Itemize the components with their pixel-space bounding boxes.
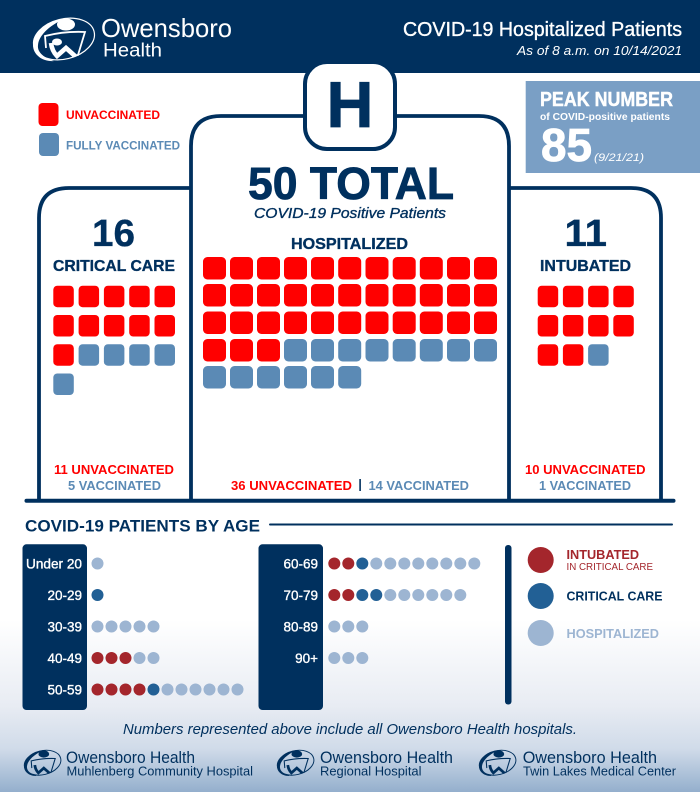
intubated totals [525, 462, 646, 493]
icon: Owensboro Health mark [29, 12, 99, 66]
peak number callout [526, 81, 700, 173]
age labels: 30-39 [47, 620, 82, 634]
age labels: 50-59 [47, 682, 82, 698]
intubated squares [538, 286, 634, 366]
logo: Owensboro Health [29, 12, 232, 66]
total subtitle: COVID-19 Positive Patients [254, 206, 446, 222]
logo wordmark [101, 13, 232, 62]
footer logo: Twin Lakes: Twin Lakes Medical Center [523, 765, 676, 779]
footer logo: Muhlenberg: Muhlenberg Community Hospital [66, 765, 253, 779]
critical care count: 16 [92, 213, 135, 255]
intubated count: 11 [564, 213, 607, 255]
age labels [283, 556, 318, 666]
critical care totals: 5 VACCINATED [68, 478, 161, 493]
hospitalized totals: 14 VACCINATED [368, 478, 469, 493]
panel: critical care [53, 213, 175, 493]
age labels: 60-69 [283, 556, 318, 572]
age labels: 20-29 [47, 588, 82, 603]
panel: hospitalized [203, 158, 497, 493]
logo wordmark: Owensboro [101, 13, 232, 43]
legend: patient severity: CRITICAL CARE [566, 589, 663, 604]
icon: hospital H [305, 62, 395, 149]
icon: hospital H: H [327, 68, 373, 141]
footer logo: Muhlenberg: Owensboro Health [66, 748, 195, 767]
peak number callout: 85 [541, 119, 592, 171]
chart: age groups 60 and over [258, 544, 480, 710]
critical care heading: CRITICAL CARE [53, 258, 175, 275]
legend: patient severity: IN CRITICAL CARE [566, 562, 653, 573]
total count: 50 TOTAL [248, 158, 454, 209]
footer logo: Muhlenberg [22, 747, 253, 779]
hospitalized heading: HOSPITALIZED [291, 236, 408, 253]
footer logo: Twin Lakes [477, 747, 676, 779]
intubated totals: 1 VACCINATED [539, 478, 631, 493]
legend: patient severity: HOSPITALIZED [566, 626, 659, 641]
hospitalized totals [231, 478, 469, 493]
panel frames [26, 116, 674, 501]
age labels: 40-49 [47, 651, 82, 666]
critical care totals: 11 UNVACCINATED [54, 462, 174, 477]
header band [0, 0, 700, 73]
hospitalized squares [203, 257, 497, 388]
header title: COVID-19 Hospitalized Patients [403, 19, 682, 41]
header date: As of 8 a.m. on 10/14/2021 [516, 44, 682, 58]
legend: vaccination status [38, 103, 180, 156]
age labels: 90+ [295, 651, 318, 666]
age labels [26, 556, 82, 698]
peak number callout: (9/21/21) [594, 152, 644, 164]
intubated heading: INTUBATED [540, 258, 631, 275]
peak number callout: PEAK NUMBER [540, 89, 673, 111]
hospitalized totals: 36 UNVACCINATED [231, 478, 352, 493]
panel: intubated [525, 213, 646, 493]
intubated totals: 10 UNVACCINATED [525, 462, 646, 477]
footnote: Numbers represented above include all Owensboro Health hospitals. [123, 721, 577, 738]
age labels: 80-89 [283, 620, 318, 634]
legend: vaccination status: UNVACCINATED [66, 108, 160, 122]
legend: patient severity [505, 545, 663, 704]
age labels: 70-79 [283, 588, 318, 603]
footer logo: Regional: Regional Hospital [320, 765, 422, 779]
age labels: Under 20 [26, 556, 82, 572]
logo wordmark: Health [103, 40, 162, 62]
peak number callout: of COVID-positive patients [540, 112, 670, 123]
critical care totals [54, 462, 174, 493]
patient dots [92, 558, 244, 696]
critical care squares [53, 286, 175, 395]
legend: vaccination status: FULLY VACCINATED [66, 138, 180, 152]
patient dots [328, 558, 480, 664]
footer logo: Twin Lakes: Owensboro Health [523, 748, 657, 767]
footer logo: Regional [275, 747, 453, 779]
legend: patient severity: INTUBATED [566, 547, 639, 562]
section heading: patients by age: COVID-19 PATIENTS BY AGE [25, 517, 260, 536]
chart: age groups under 60 [22, 544, 244, 710]
footer logo: Regional: Owensboro Health [320, 748, 453, 767]
